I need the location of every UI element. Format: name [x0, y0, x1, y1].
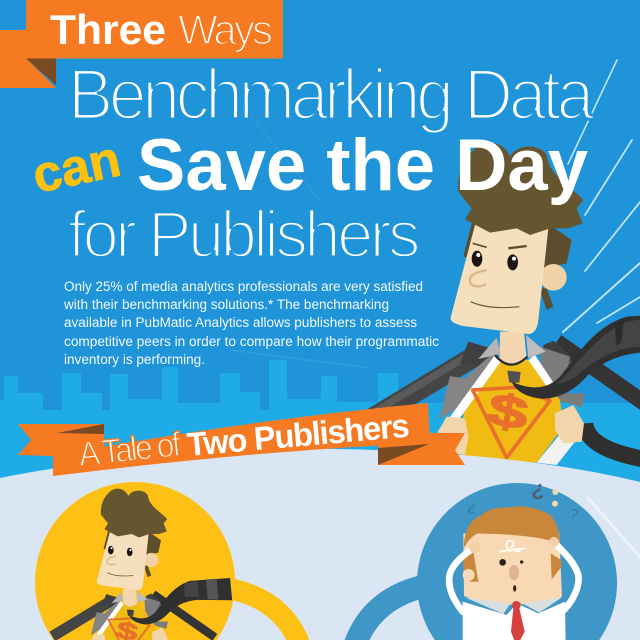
small hero neck [123, 589, 137, 607]
hero jacket [439, 341, 585, 419]
small hero hands [90, 628, 168, 640]
lower light panel [0, 449, 640, 640]
worried question marks: ? [466, 499, 479, 517]
title: for Publishers: for Publishers [68, 197, 418, 271]
hero nose and mouth [470, 270, 519, 308]
worried squiggle [499, 541, 525, 552]
ribbon body [53, 403, 430, 476]
worried side hair [463, 552, 562, 582]
worried head [463, 533, 562, 608]
worried mouth [513, 585, 516, 592]
small hero emblem [109, 617, 149, 640]
small hero face [97, 532, 149, 590]
worried thought dots [552, 489, 558, 507]
worried hands [469, 537, 559, 553]
hero hair top [458, 143, 583, 235]
title: Three Ways banner [0, 0, 283, 88]
small hero eyes [108, 546, 133, 556]
small hero collar [112, 591, 147, 603]
small hero jacket [91, 594, 168, 635]
ribbon right tail [378, 433, 465, 465]
light ray on lower panel [587, 497, 640, 557]
worried question marks: ? [568, 506, 580, 524]
hero back hair [463, 223, 572, 268]
small hero shirt [103, 604, 157, 640]
hero collar [478, 335, 546, 359]
background: speed rays [225, 60, 640, 368]
intro paragraph: competitive peers in order to compare how their programmatic [64, 334, 439, 349]
worried shirt [463, 602, 566, 640]
hero neck [499, 332, 527, 366]
worried arms [449, 545, 579, 612]
worried hair [464, 506, 559, 547]
hero hands [437, 405, 584, 455]
blue ring [355, 586, 425, 640]
small superhero businessman [52, 489, 232, 640]
heading: Three: Three [50, 6, 166, 53]
banner body [26, 0, 283, 58]
worried tie [511, 601, 525, 640]
worried ear [463, 569, 475, 581]
worried publisher [449, 478, 580, 640]
hero shield emblem: $ [484, 383, 532, 440]
background: skyline [0, 360, 640, 500]
ribbon text: A Tale of: A Tale of [77, 425, 183, 474]
yellow ring [226, 588, 300, 640]
small hero arms [52, 594, 215, 637]
ribbon left tail [18, 424, 104, 456]
yellow circle [35, 482, 235, 640]
hero open white shirt [439, 355, 575, 465]
hero yellow shirt [462, 360, 563, 463]
title: can: can [27, 130, 125, 204]
hero back arms [367, 342, 640, 465]
small hero mouth and nose [107, 556, 133, 576]
ribbon: A Tale of Two Publishers [18, 403, 465, 476]
intro paragraph: with their benchmarking solutions.* The benchmarking [63, 297, 389, 312]
worried collar shadow [465, 597, 562, 614]
banner fold [0, 30, 56, 88]
small hero shirt edge [91, 601, 123, 640]
blue circle [417, 483, 617, 640]
banner shadow fold [26, 58, 56, 85]
hero face [451, 225, 548, 334]
small hero ear [144, 553, 158, 577]
worried question marks: ? [530, 478, 547, 505]
small hero hair [101, 489, 167, 538]
hero ear [539, 264, 567, 310]
hero: large superhero businessman [367, 143, 640, 465]
ribbon text: Two Publishers: Two Publishers [185, 407, 410, 463]
hero shield emblem [473, 383, 550, 458]
hero eyes and brows [472, 243, 527, 270]
small hero tie [127, 578, 232, 624]
intro paragraph: Only 25% of media analytics professionals are very satisfied [64, 279, 423, 294]
worried nose [509, 565, 519, 580]
worried question marks [466, 478, 580, 524]
intro paragraph: inventory is performing. [64, 352, 205, 367]
title: Save the Day: Save the Day [137, 125, 588, 206]
ribbon right fold [378, 444, 429, 465]
small hero back hair [104, 531, 161, 555]
hero tie [495, 311, 640, 399]
title: Benchmarking Data: Benchmarking Data [68, 56, 595, 135]
intro paragraph: available in PubMatic Analytics allows publishers to assess [64, 315, 417, 330]
intro paragraph [63, 279, 439, 367]
ribbon left fold [57, 424, 104, 434]
heading: Ways: Ways [178, 6, 272, 53]
worried eyes [499, 559, 523, 566]
